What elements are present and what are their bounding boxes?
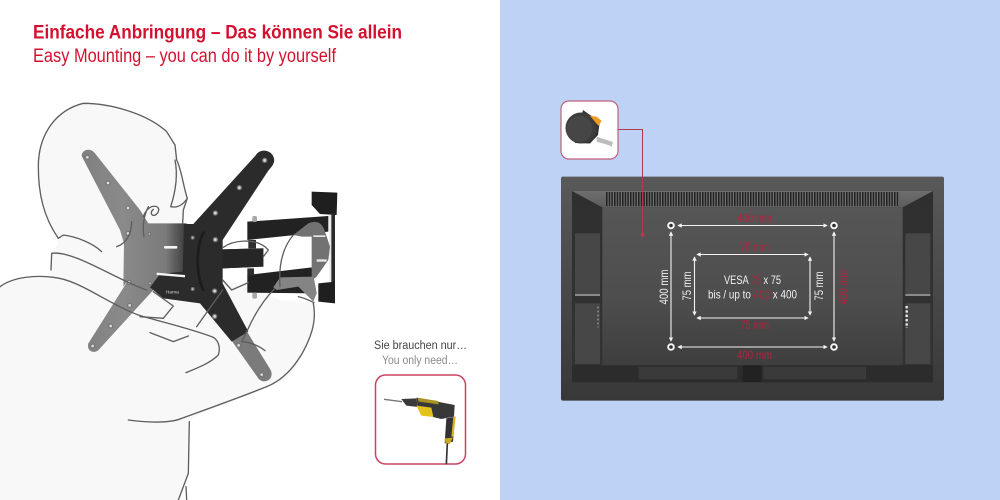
icon: power drill bbox=[384, 398, 456, 464]
vertical labels: 75 mm bbox=[680, 272, 694, 300]
plate arc detail bbox=[198, 233, 203, 290]
TV right side handles bbox=[905, 233, 930, 364]
VESA specification text: bis / up to 400 x 400 bbox=[708, 288, 797, 302]
person body fill bbox=[0, 103, 315, 500]
person outlines bbox=[0, 103, 314, 500]
hand: grey fingers over the arm bbox=[293, 222, 330, 281]
plate slots and brand: Hama bbox=[166, 289, 179, 295]
bracket: wall plate bottom block bbox=[318, 282, 335, 303]
TV bottom ledge bbox=[572, 365, 933, 382]
bracket: wall plate dark bar bbox=[331, 213, 335, 283]
bracket: white rail bbox=[329, 215, 331, 282]
bracket: connector arm bbox=[223, 248, 263, 268]
heading: German and English title bbox=[33, 22, 402, 67]
bracket: hinge screws bbox=[252, 216, 257, 299]
TV outer shell bbox=[561, 177, 944, 401]
bracket: lower arm bbox=[247, 267, 317, 293]
plate screw holes bbox=[85, 155, 267, 377]
red horizontal labels: 400 mm bbox=[737, 348, 772, 362]
red horizontal labels: 400 mm bbox=[737, 211, 772, 225]
panel: right blue background bbox=[500, 0, 1000, 500]
TV vent bbox=[606, 192, 899, 206]
bracket: hinge posts bbox=[247, 240, 256, 275]
TV top bevel bbox=[572, 191, 933, 207]
panel: TV back bbox=[561, 177, 944, 401]
TV ports bbox=[598, 306, 907, 328]
heading: German and English title: Easy Mounting – you can do it by yourself bbox=[33, 46, 337, 67]
bracket: upper arm bbox=[247, 216, 328, 240]
vertical labels bbox=[657, 270, 850, 304]
mounting holes bbox=[668, 223, 837, 350]
TV left side handles bbox=[575, 233, 600, 364]
vertical labels: 75 mm bbox=[812, 272, 826, 300]
VESA specification text: VESA 75 x 75 bbox=[724, 273, 781, 287]
ghost VESA plate bbox=[82, 150, 187, 352]
hand: screw highlights bbox=[313, 235, 327, 262]
red horizontal labels bbox=[737, 211, 772, 362]
heading: German and English title: Einfache Anbringung – Das können Sie allein bbox=[33, 22, 402, 44]
plate slots and brand bbox=[157, 246, 185, 295]
black VESA plate bbox=[150, 151, 274, 342]
TV center panel bbox=[602, 207, 903, 365]
vertical labels: 400 mm bbox=[657, 270, 671, 304]
caption: you only need: You only need… bbox=[382, 355, 458, 367]
hand: grey wrist bbox=[273, 277, 317, 302]
TV recessed frame bbox=[572, 191, 933, 382]
caption: you only need bbox=[374, 340, 467, 367]
VESA diagram bbox=[657, 211, 850, 362]
red horizontal labels: 75 mm bbox=[740, 318, 769, 332]
inner measurement arrows bbox=[694, 254, 810, 318]
bracket: wall plate top block bbox=[312, 192, 337, 215]
illustration: person mounting the wall bracket bbox=[0, 103, 337, 500]
red horizontal labels: 75 mm bbox=[740, 240, 769, 254]
card: drill bbox=[376, 375, 466, 464]
card: measuring tape bbox=[561, 101, 618, 159]
leader line from tape to TV bbox=[618, 130, 644, 236]
outer measurement arrows bbox=[671, 226, 834, 347]
ghost bottom right arm bbox=[230, 328, 272, 381]
vertical labels: 400 mm bbox=[836, 270, 850, 304]
caption: you only need: Sie brauchen nur… bbox=[374, 340, 467, 352]
icon: tape measure bbox=[566, 110, 613, 147]
VESA specification text bbox=[708, 273, 797, 302]
